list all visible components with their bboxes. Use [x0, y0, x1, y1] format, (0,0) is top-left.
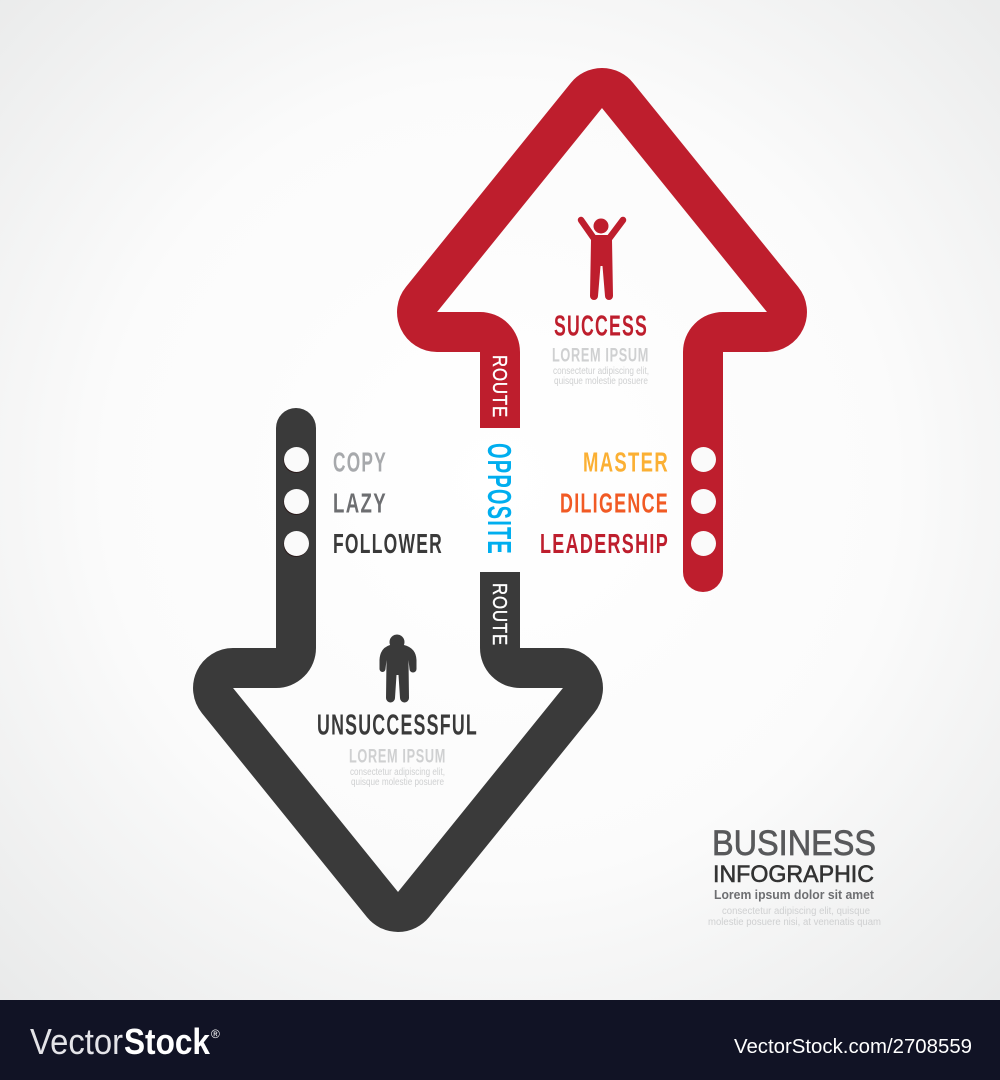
title block: business infographic: consectetur adipiscing elit, quisque: [722, 906, 870, 917]
text block: success description: LOREM IPSUM: [552, 346, 649, 366]
list: negative traits: COPY: [333, 446, 387, 478]
icon: successful person: [581, 218, 623, 300]
title block: business infographic: molestie posuere nisi, at venenatis quam: [708, 917, 881, 928]
dark down arrow route: [213, 408, 583, 912]
list: positive traits: [540, 446, 669, 559]
footer bar: VectorStock.com/2708559: [734, 1036, 972, 1058]
list: positive traits: LEADERSHIP: [540, 528, 669, 559]
text block: unsuccessful description: LOREM IPSUM: [349, 746, 446, 768]
label: route on red arrow: ROUTE: [488, 355, 510, 418]
title block: business infographic: [708, 824, 881, 928]
text block: unsuccessful description: [349, 746, 446, 788]
heading: success: SUCCESS: [554, 310, 648, 342]
label: route on dark arrow: ROUTE: [488, 583, 510, 646]
title block: business infographic: Lorem ipsum dolor sit amet: [714, 887, 875, 902]
list: positive traits: DILIGENCE: [560, 488, 669, 518]
footer bar: Stock: [124, 1021, 211, 1062]
footer bar: [0, 1000, 1000, 1080]
list: negative traits: FOLLOWER: [333, 528, 443, 559]
footer bar: ®: [211, 1027, 220, 1041]
list: negative traits: [333, 446, 443, 559]
red up arrow route: [417, 88, 787, 592]
list: positive traits: MASTER: [583, 446, 669, 478]
list: negative traits: LAZY: [333, 488, 387, 518]
text block: unsuccessful description: quisque molestie posuere: [351, 777, 444, 788]
heading: unsuccessful: UNSUCCESSFUL: [317, 710, 478, 742]
footer bar: Vector: [30, 1021, 123, 1062]
title block: business infographic: BUSINESS: [712, 824, 876, 863]
label: opposite: OPPOSITE: [481, 443, 518, 555]
text block: success description: consectetur adipiscing elit,: [553, 366, 649, 377]
icon: unsuccessful person: [380, 634, 417, 702]
text block: unsuccessful description: consectetur adipiscing elit,: [350, 767, 445, 778]
text block: success description: quisque molestie posuere: [554, 376, 648, 387]
text block: success description: [552, 346, 649, 387]
title block: business infographic: INFOGRAPHIC: [713, 861, 874, 888]
